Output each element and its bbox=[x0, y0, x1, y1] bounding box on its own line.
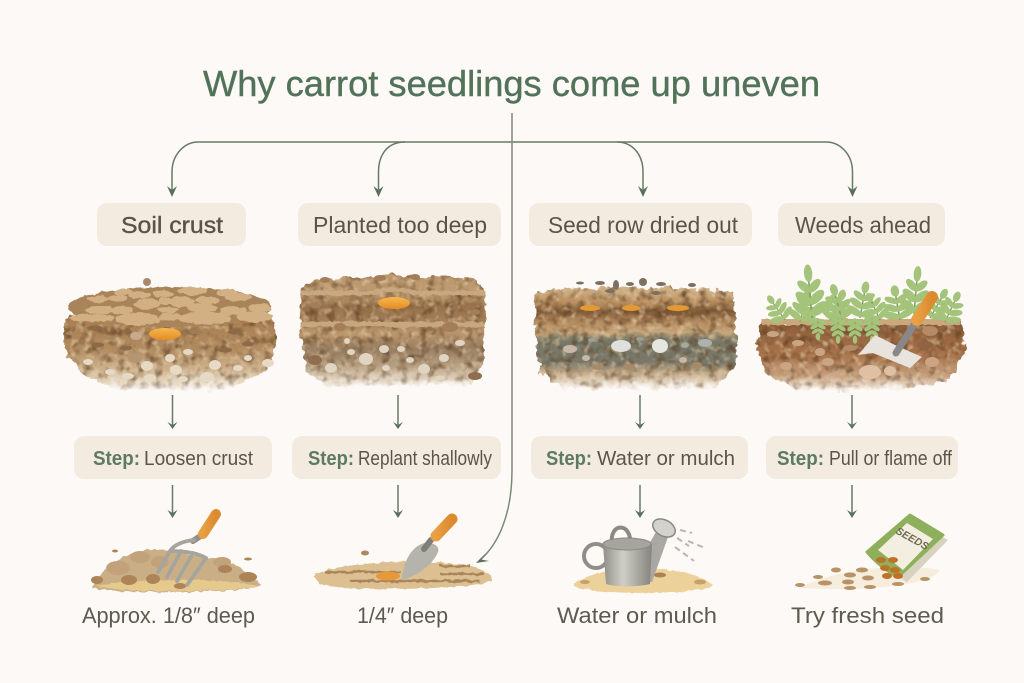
panel: planted too deep bbox=[292, 203, 501, 628]
arrow down bbox=[847, 485, 857, 518]
arrow: long connector from title to 1/4 inch deep bbox=[476, 113, 512, 563]
step: loosen crust: Loosen crust bbox=[144, 447, 253, 470]
soil cross-section with deep seed bbox=[300, 274, 487, 386]
arrow down bbox=[393, 485, 403, 518]
weeds foliage bbox=[756, 263, 973, 344]
icon: garden fork in soil bbox=[91, 514, 261, 592]
step: water or mulch: Water or mulch bbox=[597, 447, 735, 470]
step: replant shallowly bbox=[292, 436, 501, 479]
step: pull or flame off bbox=[766, 436, 958, 479]
cause label: planted too deep bbox=[298, 203, 501, 246]
cause label: seed row dried out bbox=[529, 203, 752, 246]
step: loosen crust bbox=[74, 436, 272, 479]
arrow down bbox=[393, 395, 403, 429]
soil cross-section with dry seeds bbox=[534, 278, 737, 389]
arrow: branching connectors to the four causes bbox=[167, 142, 858, 197]
soil cross-section with cracked crust bbox=[62, 278, 277, 390]
icon: seed packet with spilled seeds bbox=[795, 515, 948, 590]
soil cross-section with weeds and trowel bbox=[756, 263, 973, 390]
panel: soil crust bbox=[62, 203, 277, 628]
caption: try fresh seed: Try fresh seed bbox=[791, 603, 944, 628]
carrot seed bbox=[378, 297, 410, 309]
arrow down bbox=[847, 395, 857, 429]
cause label: soil crust: Soil crust bbox=[121, 212, 223, 238]
icon: trowel with seed bbox=[313, 519, 493, 589]
trowel bbox=[858, 297, 932, 368]
title: Why carrot seedlings come up uneven bbox=[203, 63, 820, 104]
step: loosen crust: Step: bbox=[93, 448, 140, 470]
step: pull or flame off: Pull or flame off bbox=[829, 447, 952, 470]
cause label: weeds ahead: Weeds ahead bbox=[795, 212, 931, 238]
panel: weeds ahead bbox=[756, 203, 973, 628]
cause label: seed row dried out: Seed row dried out bbox=[548, 212, 738, 238]
cause label: weeds ahead bbox=[778, 203, 945, 246]
panel: seed row dried out bbox=[529, 203, 752, 628]
cause label: planted too deep: Planted too deep bbox=[313, 212, 487, 238]
arrow down bbox=[168, 485, 178, 518]
arrow down bbox=[635, 395, 645, 429]
caption: water or mulch: Water or mulch bbox=[557, 603, 717, 628]
icon: watering can bbox=[573, 515, 714, 593]
step: pull or flame off: Step: bbox=[777, 448, 824, 470]
caption: approx 1/8 inch deep: Approx. 1/8″ deep bbox=[82, 603, 255, 628]
carrot seed bbox=[149, 328, 181, 340]
step: replant shallowly: Step: bbox=[308, 448, 354, 470]
cause label: soil crust bbox=[97, 203, 246, 246]
caption: 1/4 inch deep: 1/4″ deep bbox=[357, 603, 448, 628]
step: water or mulch bbox=[531, 436, 748, 479]
step: replant shallowly: Replant shallowly bbox=[358, 447, 493, 470]
arrow down bbox=[168, 395, 178, 429]
step: water or mulch: Step: bbox=[546, 448, 592, 470]
carrot seeds bbox=[580, 305, 689, 311]
icon: seed packet with spilled seeds: SEEDS bbox=[894, 525, 931, 553]
arrow down bbox=[635, 485, 645, 518]
